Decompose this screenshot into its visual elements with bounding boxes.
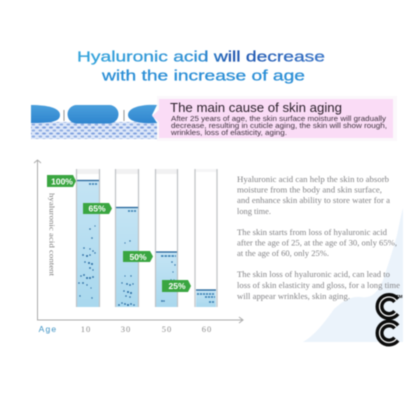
paragraph 1: and enhance skin ability to store water for a — [237, 195, 390, 205]
label: 25%: 25% — [168, 281, 186, 291]
tube: age 10 — [76, 169, 100, 307]
callout: main cause of skin aging — [152, 96, 397, 141]
callout: main cause of skin aging: The main cause of skin aging — [170, 100, 342, 115]
background: pale blue corner shape — [303, 208, 403, 342]
paragraph 1: long time. — [237, 206, 271, 216]
age labels: Age — [39, 324, 57, 334]
tube: age 50 — [155, 169, 178, 307]
label: 65% — [83, 203, 112, 214]
label: 100%: 100% — [51, 176, 73, 186]
paragraph 3: will appear wrinkles, skin aging. — [237, 291, 350, 301]
title — [77, 48, 325, 84]
age labels: 30 — [121, 324, 131, 334]
age labels: 60 — [202, 324, 212, 334]
chart: hyaluronic acid content by age — [34, 160, 243, 334]
paragraph 2: The skin starts from loss of hyaluronic acid — [237, 227, 388, 237]
paragraph 2: at the age of 60, only 25%. — [237, 248, 329, 258]
title: with the increase of age — [101, 68, 305, 84]
tube: age 30 — [115, 169, 139, 307]
callout: main cause of skin aging: wrinkles, loss of elasticity, aging. — [170, 128, 287, 137]
logo: double C mark — [380, 294, 403, 342]
paragraph 2: after the age of 25, at the age of 30, only 65%, — [237, 238, 397, 248]
age labels: 10 — [81, 324, 91, 334]
logo: double C mark: TM — [396, 294, 403, 299]
paragraph 3 — [237, 269, 400, 301]
age labels: 50 — [162, 324, 172, 334]
tube: age 60 — [195, 169, 217, 307]
paragraph 3: loss of skin elasticity and gloss, for a long time — [237, 280, 400, 290]
label: 50% — [123, 251, 153, 262]
callout: main cause of skin aging: After 25 years of age, the skin surface moisture will gradually — [171, 114, 386, 123]
paragraph 1: Hyaluronic acid can help the skin to absorb — [237, 174, 390, 184]
title: Hyaluronic acid will decrease — [77, 48, 325, 66]
callout: main cause of skin aging: decrease, resulting in cuticle aging, the skin will show rough, — [171, 121, 387, 130]
y axis label: hyaluronic acid content — [48, 193, 56, 277]
age labels — [39, 324, 212, 334]
axes — [34, 160, 243, 323]
paragraph 3: The skin loss of hyaluronic acid, can lead to — [237, 269, 391, 279]
text block: explanation — [237, 174, 400, 301]
paragraph 1: moisture from the body and skin surface, — [237, 184, 382, 194]
label: 65%: 65% — [88, 204, 106, 214]
label: 25% — [162, 280, 191, 292]
skin illustration — [31, 105, 158, 139]
paragraph 2 — [237, 227, 397, 258]
paragraph 1 — [237, 174, 390, 216]
label: 50%: 50% — [129, 252, 147, 262]
label: 100% — [47, 175, 76, 187]
